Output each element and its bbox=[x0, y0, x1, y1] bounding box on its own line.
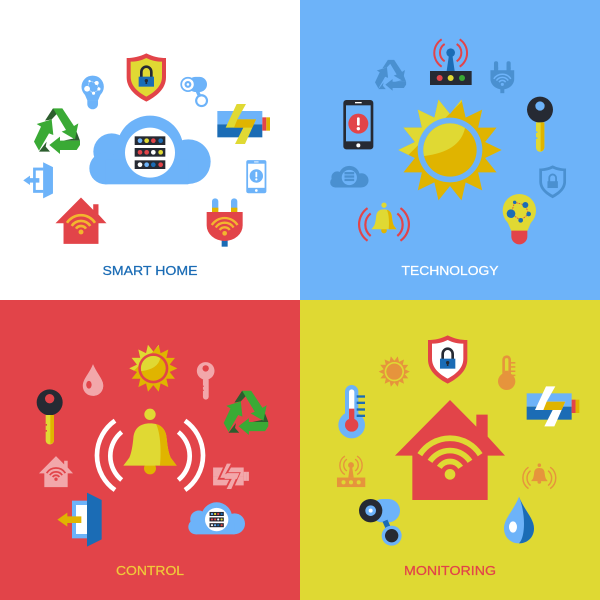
icon: bell with waves bbox=[97, 409, 203, 490]
icon: light bulb bbox=[81, 76, 104, 109]
icon: sun mono bbox=[379, 357, 410, 387]
icon: shield bbox=[428, 335, 467, 384]
icon: plug mono bbox=[490, 61, 514, 93]
icon: router mono bbox=[337, 456, 365, 487]
icon: house mono bbox=[39, 456, 73, 487]
heading: control: CONTROL bbox=[116, 563, 184, 578]
icon: camera bbox=[359, 499, 402, 546]
icon group: smart home bbox=[23, 53, 270, 247]
icon: wifi house bbox=[55, 197, 107, 244]
icon: cloud server bbox=[89, 116, 211, 184]
icon group: control bbox=[37, 345, 268, 547]
icon: battery mono bbox=[213, 463, 249, 490]
icon: recycle mono bbox=[375, 60, 406, 91]
icon: door exit bbox=[23, 162, 53, 198]
icon: router bbox=[430, 39, 472, 85]
icon: wifi house bbox=[395, 400, 505, 500]
icon: water drop bbox=[504, 497, 534, 543]
panel: smart home bbox=[0, 0, 300, 300]
icon: cloud mono bbox=[330, 166, 369, 188]
icon: battery bbox=[217, 104, 270, 144]
icon: thermometer mono bbox=[498, 355, 515, 390]
icon group: monitoring bbox=[337, 335, 579, 546]
heading: technology: TECHNOLOGY bbox=[402, 263, 499, 278]
icon: battery bbox=[527, 386, 579, 426]
icon: door exit bbox=[57, 493, 102, 547]
panel: technology bbox=[300, 0, 600, 300]
icon: sun bbox=[398, 100, 502, 200]
icon: cloud server bbox=[188, 502, 245, 534]
icon: phone alert bbox=[246, 160, 266, 193]
icon: key mono bbox=[197, 362, 215, 400]
icon: bell mono bbox=[523, 463, 556, 489]
icon: thermometer bbox=[338, 385, 365, 438]
icon: key bbox=[527, 97, 553, 152]
icon: recycle bbox=[34, 108, 80, 154]
panel: monitoring bbox=[300, 300, 600, 600]
icon: key bbox=[37, 389, 63, 444]
icon: sun bbox=[129, 345, 177, 392]
panel: control bbox=[0, 300, 300, 600]
icon: shield bbox=[127, 53, 166, 102]
icon: phone alert bbox=[343, 100, 373, 149]
heading: monitoring: MONITORING bbox=[404, 563, 496, 578]
heading: smart home: SMART HOME bbox=[102, 263, 198, 278]
icon: camera bbox=[180, 77, 208, 107]
icon: light bulb bbox=[503, 194, 536, 244]
icon: shield mono bbox=[539, 165, 566, 198]
icon: wifi plug bbox=[207, 198, 243, 247]
icon: bell with waves bbox=[359, 202, 409, 241]
icon: recycle bbox=[224, 391, 268, 435]
icon: water drop mono bbox=[83, 364, 103, 396]
icon group: technology bbox=[330, 39, 566, 244]
